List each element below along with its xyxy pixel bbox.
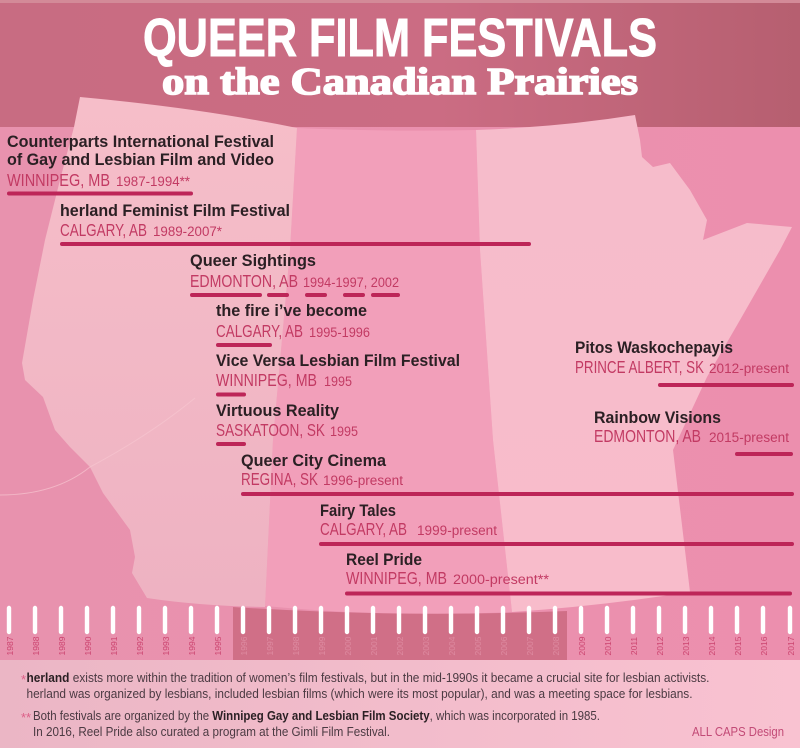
- footnote: Winnipeg society: Both festivals are organized by the Winnipeg Gay and Lesbian Film Society, which was incorporated in 1985.: [33, 708, 600, 723]
- timeline band: shaded period 1996-2008: [233, 607, 567, 661]
- festival: Rainbow Visions: [594, 409, 791, 454]
- footnote: Winnipeg society: In 2016, Reel Pride also curated a program at the Gimli Film Festival.: [33, 724, 390, 739]
- timeline year labels: 1996: [239, 636, 249, 655]
- festival: Pitos Waskochepayis: [575, 339, 792, 385]
- timeline year labels: 2003: [421, 636, 431, 655]
- map: Saskatchewan: [265, 128, 512, 614]
- festival: herland: 1989-2007*: [153, 224, 223, 239]
- timeline year labels: 2007: [525, 636, 535, 655]
- festival: Vice Versa: Vice Versa Lesbian Film Festival: [216, 352, 460, 370]
- timeline year labels: 2008: [551, 636, 561, 655]
- timeline year labels: 2000: [343, 636, 353, 655]
- footnote: herland: herland exists more within the tradition of women’s film festivals, but in the mid-1990s it became a crucial site for lesbian activists.: [26, 670, 710, 685]
- festival: herland: CALGARY, AB: [60, 220, 147, 240]
- festival: Fairy Tales: CALGARY, AB: [320, 519, 407, 539]
- festival: Fairy Tales: Fairy Tales: [320, 502, 396, 520]
- timeline year labels: 2011: [629, 637, 639, 655]
- timeline year labels: 2001: [369, 636, 379, 655]
- timeline year labels: 1999: [317, 636, 327, 655]
- footnote: Winnipeg society: **: [21, 710, 31, 725]
- timeline year labels: 2016: [759, 636, 769, 655]
- timeline year labels: 1992: [135, 636, 145, 655]
- timeline year labels: 2012: [655, 636, 665, 655]
- festival: Counterparts: WINNIPEG, MB: [7, 170, 110, 190]
- festival: the fire i've become: [216, 302, 370, 345]
- festival: Virtuous Reality: 1995: [330, 424, 358, 439]
- timeline year labels: 2013: [681, 636, 691, 655]
- timeline year labels: 2004: [447, 636, 457, 655]
- timeline year labels: 1993: [161, 636, 171, 655]
- festival: Virtuous Reality: [216, 402, 358, 444]
- festival: Queer Sightings: EDMONTON, AB: [190, 271, 298, 291]
- timeline year labels: 1998: [291, 636, 301, 655]
- scratch line on Alberta: [0, 398, 195, 495]
- festival: Rainbow Visions: EDMONTON, AB: [594, 426, 701, 446]
- festival: Vice Versa: WINNIPEG, MB: [216, 370, 317, 390]
- festival: Pitos Waskochepayis: 2012-present: [709, 361, 789, 376]
- title: QUEER FILM FESTIVALS: [143, 8, 657, 68]
- timeline year labels: 2017: [786, 636, 796, 655]
- timeline year labels: 1989: [57, 636, 67, 655]
- festival: the fire i've become: CALGARY, AB: [216, 321, 303, 341]
- timeline year labels: [5, 636, 796, 655]
- festival: Reel Pride: WINNIPEG, MB: [346, 568, 447, 588]
- festival: Rainbow Visions: 2015-present: [709, 430, 789, 445]
- festival: the fire i've become: the fire i’ve become: [216, 302, 367, 320]
- festival: Counterparts: of Gay and Lesbian Film and Video: [7, 151, 274, 169]
- festival: Fairy Tales: [320, 502, 792, 544]
- festival: herland: [60, 202, 529, 244]
- festival: the fire i've become: 1995-1996: [309, 325, 370, 340]
- festival: Queer City Cinema: [241, 452, 792, 494]
- festival: Queer Sightings: [190, 252, 399, 295]
- festival: Queer Sightings: Queer Sightings: [190, 252, 316, 270]
- timeline year labels: 1988: [31, 636, 41, 655]
- timeline year labels: 1994: [187, 636, 197, 655]
- timeline year labels: 2006: [499, 636, 509, 655]
- festival: Counterparts: [7, 133, 274, 194]
- timeline year labels: 2005: [473, 636, 483, 655]
- festival: Pitos Waskochepayis: Pitos Waskochepayis: [575, 339, 733, 357]
- timeline year labels: 1997: [265, 636, 275, 655]
- timeline year labels: 2009: [577, 636, 587, 655]
- festival: Counterparts: 1987-1994**: [116, 174, 191, 189]
- timeline year labels: 1995: [213, 636, 223, 655]
- festival: Reel Pride: [346, 551, 790, 594]
- festival: Reel Pride: Reel Pride: [346, 551, 422, 569]
- header band: [0, 0, 800, 127]
- timeline year labels: 1987: [5, 636, 15, 655]
- timeline year labels: 2015: [733, 636, 743, 655]
- credit: ALL CAPS Design: [692, 725, 784, 739]
- festival: Reel Pride: 2000-present**: [453, 572, 550, 587]
- timeline year labels: 1991: [109, 636, 119, 655]
- timeline year labels: 1990: [83, 636, 93, 655]
- footnote: herland: [21, 670, 710, 701]
- subtitle: on the Canadian Prairies: [162, 61, 638, 103]
- map: Alberta: [22, 97, 297, 607]
- festival: Queer City Cinema: 1996-present: [323, 473, 403, 488]
- festival: Rainbow Visions: Rainbow Visions: [594, 409, 721, 427]
- festival: Pitos Waskochepayis: PRINCE ALBERT, SK: [575, 357, 704, 377]
- footnote: Winnipeg society: [21, 708, 600, 739]
- footnote: herland: *: [21, 672, 26, 687]
- footer panel: [0, 660, 800, 748]
- festival: Vice Versa: 1995: [324, 374, 352, 389]
- footnote: herland: herland was organized by lesbians, included lesbian films (which were its most popular), and was a meeting space for lesbians.: [26, 686, 692, 701]
- festival: herland: herland Feminist Film Festival: [60, 202, 290, 220]
- festival: Fairy Tales: 1999-present: [417, 523, 497, 538]
- timeline year labels: 2002: [395, 636, 405, 655]
- festival: Counterparts: Counterparts International Festival: [7, 133, 274, 151]
- festival: Virtuous Reality: Virtuous Reality: [216, 402, 340, 420]
- map: Manitoba: [476, 115, 792, 612]
- festival: Virtuous Reality: SASKATOON, SK: [216, 420, 325, 440]
- festival: Queer City Cinema: Queer City Cinema: [241, 452, 387, 470]
- timeline ticks: [9, 608, 790, 632]
- festival: Queer Sightings: 1994-1997, 2002: [303, 275, 399, 290]
- festival: Queer City Cinema: REGINA, SK: [241, 469, 318, 489]
- timeline year labels: 2010: [603, 636, 613, 655]
- festival: Vice Versa: [216, 352, 460, 394]
- timeline year labels: 2014: [707, 636, 717, 655]
